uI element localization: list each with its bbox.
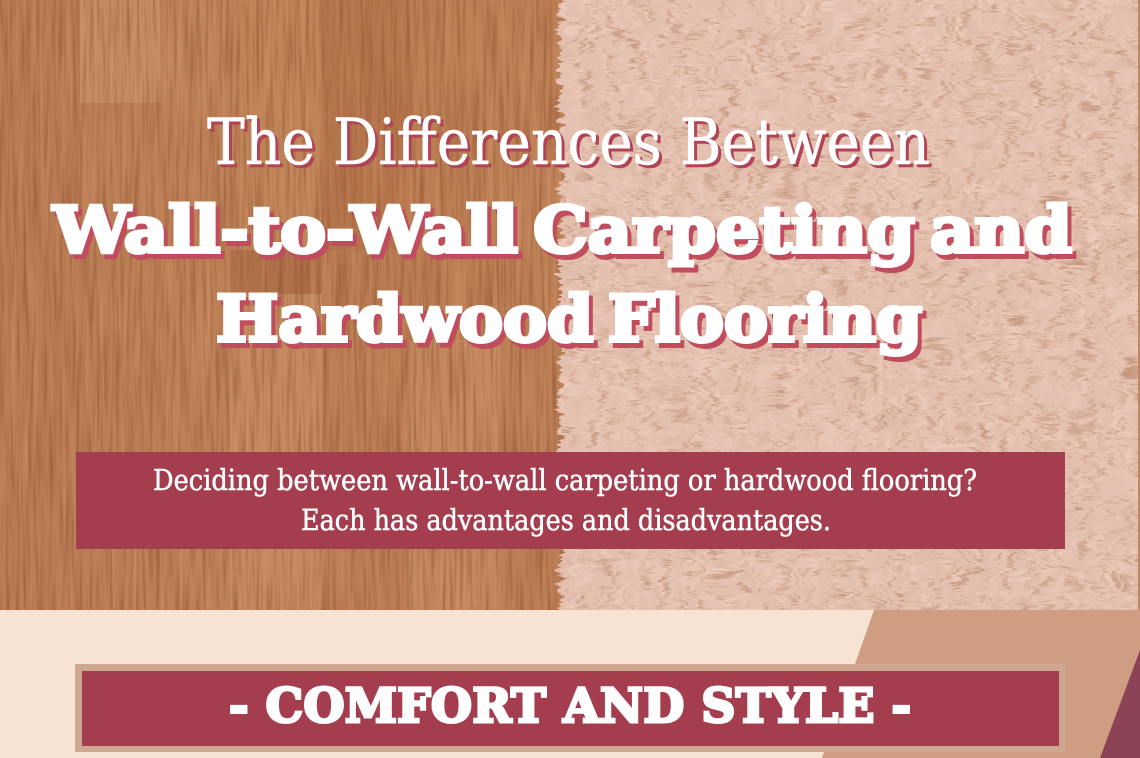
tan diagonal shape	[822, 610, 1140, 758]
carpet photo	[560, 0, 1140, 630]
title line 2: Wall-to-Wall Carpeting and	[56, 198, 1076, 273]
section heading banner	[75, 664, 1065, 752]
title line 3: Hardwood Flooring	[220, 287, 926, 362]
intro text: Deciding between wall-to-wall carpeting or hardwood flooring?	[153, 463, 977, 497]
intro text	[153, 463, 977, 537]
title line 1: The Differences Between	[207, 106, 930, 180]
title line 2: Wall-to-Wall Carpeting and	[52, 193, 1072, 268]
title line 3: Hardwood Flooring	[216, 282, 922, 357]
intro callout	[76, 452, 1065, 549]
title line 1: The Differences Between	[210, 109, 933, 183]
thin wood strip at right edge	[1138, 0, 1140, 610]
dark diagonal shape	[1100, 650, 1140, 758]
section heading: - COMFORT AND STYLE -	[229, 679, 911, 734]
intro text: Each has advantages and disadvantages.	[301, 503, 831, 537]
title	[52, 106, 1076, 362]
wood floor photo	[0, 0, 580, 610]
section background	[0, 610, 1140, 758]
